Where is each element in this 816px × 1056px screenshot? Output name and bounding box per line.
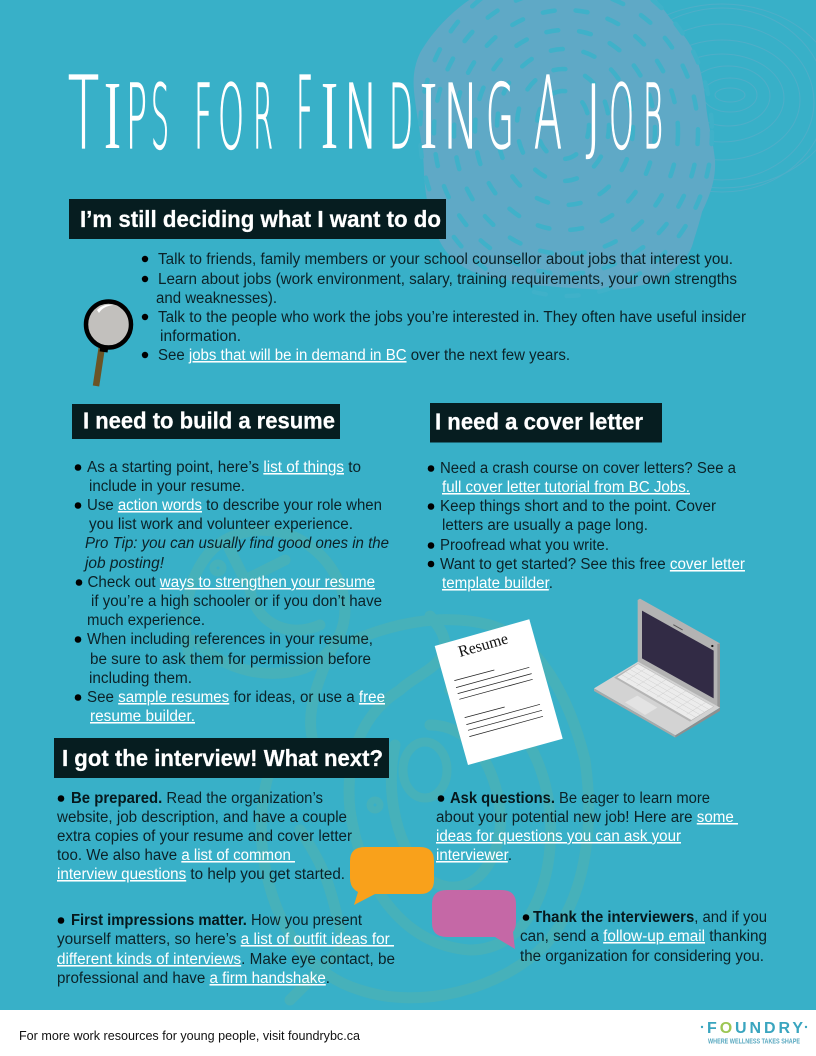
tip: first impressions: First impressions matter. How you present: [71, 912, 363, 929]
bullet list: resume: much experience.: [87, 612, 205, 629]
tip: thank the interviewers: can, send a follow-up email thanking: [520, 928, 767, 945]
heading: still deciding: [69, 199, 446, 239]
heading: interview: [54, 738, 389, 778]
bullet list: resume: include in your resume.: [89, 478, 245, 495]
icon: resume sheet: Resume: [456, 630, 510, 661]
icon: magnifying glass: [86, 302, 131, 386]
bullet list: resume: Pro Tip: you can usually find good ones in the: [85, 535, 389, 552]
logo: Foundry: [701, 1020, 807, 1046]
tip: first impressions: yourself matters, so here’s a list of outfit ideas for: [57, 931, 394, 948]
title: F: [194, 65, 212, 169]
title: P: [126, 65, 147, 169]
tip: ask questions: interviewer.: [436, 847, 512, 864]
background: teal-green swirl figure: [185, 530, 589, 1000]
tip: be prepared: Be prepared. Read the organization’s: [71, 790, 323, 807]
tip: ask questions: ideas for questions you can ask your: [436, 828, 681, 845]
bullet list: cover letter: full cover letter tutorial from BC Jobs.: [442, 479, 690, 496]
tip: be prepared: website, job description, and have a couple: [56, 809, 347, 826]
title: F: [296, 55, 313, 172]
bullet list: still deciding: Talk to the people who work the jobs you’re interested in. They often have useful insider: [158, 309, 746, 326]
bullet list: resume: When including references in your resume,: [87, 631, 373, 648]
panel: cover letter: [428, 403, 745, 592]
tip: first impressions: [57, 912, 395, 987]
bullet list: resume: including them.: [89, 670, 192, 687]
title: A: [534, 55, 562, 172]
bullet list: cover letter: [428, 460, 745, 592]
bullet list: cover letter: Need a crash course on cover letters? See a: [440, 460, 736, 477]
bullet list: cover letter: letters are usually a page long.: [442, 517, 648, 534]
footer text: For more work resources for young people, visit foundrybc.ca: [19, 1028, 361, 1043]
bullet list: cover letter: Keep things short and to the point. Cover: [440, 498, 716, 515]
heading: interview: I got the interview! What next?: [62, 745, 383, 771]
title: R: [253, 65, 273, 169]
bullet list: cover letter: Proofread what you write.: [440, 537, 609, 554]
tip: be prepared: too. We also have a list of common: [57, 847, 295, 864]
tip: thank the interviewers: [520, 909, 767, 965]
bullet list: resume: resume builder.: [90, 708, 195, 725]
tip: first impressions: different kinds of interviews. Make eye contact, be: [57, 951, 395, 968]
bullet list: cover letter: template builder.: [442, 575, 553, 592]
bullet list: resume: you list work and volunteer experience.: [89, 516, 353, 533]
title: O: [218, 65, 244, 169]
bullet list: resume: Check out ways to strengthen your resume: [88, 574, 375, 591]
bullet list: resume: As a starting point, here’s list of things to: [87, 459, 361, 476]
bullet list: still deciding: See jobs that will be in demand in BC over the next few years.: [158, 347, 570, 364]
bullet list: still deciding: and weaknesses).: [156, 290, 277, 307]
title: I: [104, 62, 121, 170]
heading: build a resume: I need to build a resume: [83, 408, 335, 434]
logo: Foundry: FOUNDRY: [707, 1020, 803, 1037]
bullet list: still deciding: Learn about jobs (work environment, salary, training requirements, your own strengths: [158, 271, 737, 288]
title: N: [443, 65, 479, 169]
footer bar: [0, 1010, 816, 1056]
tip: first impressions: professional and have a firm handshake.: [57, 970, 330, 987]
icon: laptop: [594, 599, 720, 738]
icon: resume sheet: [435, 619, 563, 765]
text: B: [643, 65, 663, 169]
heading: cover letter: [430, 403, 662, 442]
title: I: [420, 62, 437, 170]
heading: cover letter: I need a cover letter: [435, 408, 643, 434]
tip: thank the interviewers: Thank the interviewers, and if you: [533, 909, 767, 926]
heading: still deciding: I’m still deciding what I want to do: [80, 206, 441, 232]
title: S: [151, 65, 169, 169]
panel: build a resume: [72, 404, 389, 725]
title: D: [389, 65, 413, 169]
bullet list: still deciding: information.: [160, 328, 241, 345]
icon: orange speech bubble: [350, 847, 434, 905]
bullet list: still deciding: Talk to friends, family members or your school counsellor about jobs that interest you.: [158, 251, 733, 268]
background: dashed purple-blue blob: [414, 0, 715, 296]
tip: ask questions: Ask questions. Be eager to learn more: [450, 790, 710, 807]
panel: still deciding: [69, 199, 746, 386]
tip: be prepared: interview questions to help you get started.: [57, 866, 345, 883]
tip: be prepared: extra copies of your resume and cover letter: [57, 828, 352, 845]
title: N: [344, 65, 378, 169]
tip: ask questions: about your potential new job! Here are some: [436, 809, 738, 826]
title: O: [609, 65, 634, 169]
bullet list: still deciding: [142, 251, 746, 364]
title: [68, 55, 663, 172]
tip: thank the interviewers: the organization for considering you.: [520, 948, 764, 965]
title: J: [586, 69, 601, 164]
bullet list: resume: [75, 459, 389, 725]
bullet list: resume: if you’re a high schooler or if you don’t have: [91, 593, 382, 610]
bullet list: resume: Use action words to describe your role when: [87, 497, 382, 514]
bullet list: resume: job posting!: [83, 555, 165, 572]
panel: interview: [54, 738, 767, 987]
bullet list: cover letter: Want to get started? See this free cover letter: [440, 556, 745, 573]
title: T: [68, 55, 99, 172]
icon: pink speech bubble: [432, 890, 516, 949]
bullet list: resume: be sure to ask them for permission before: [90, 651, 371, 668]
background: thin concentric rings top right: [606, 4, 816, 192]
title: I: [321, 62, 338, 170]
bullet list: resume: See sample resumes for ideas, or use a free: [87, 689, 385, 706]
title: G: [486, 65, 514, 169]
tip: be prepared: [56, 790, 352, 883]
tip: ask questions: [436, 790, 738, 864]
